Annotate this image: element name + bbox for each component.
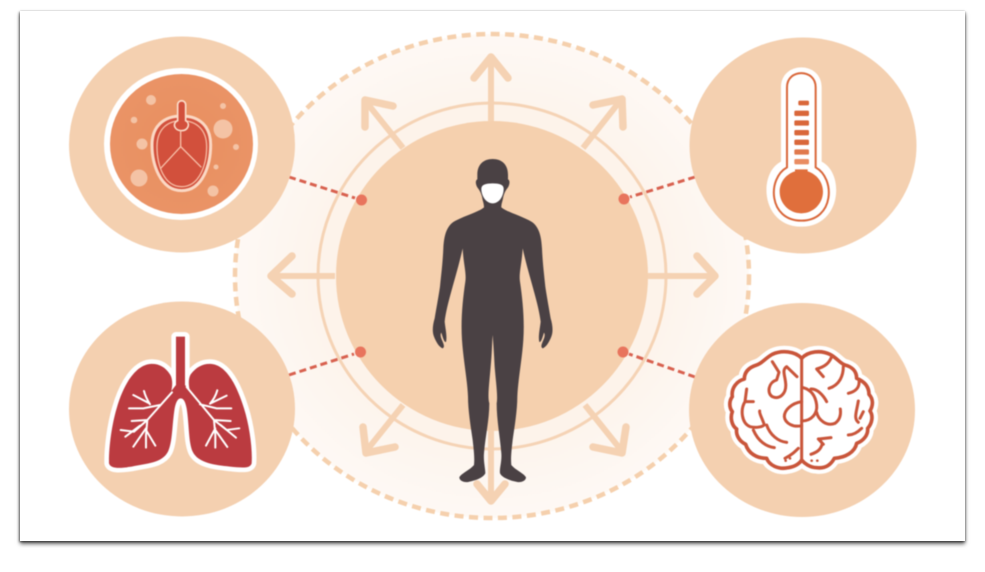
- panel: lungs: [69, 302, 295, 516]
- connector: bottom left: [289, 346, 366, 375]
- arrow up-left: [365, 100, 403, 148]
- panel: thermometer: [690, 38, 916, 254]
- organ outline: [152, 116, 211, 191]
- arrow left: [271, 256, 335, 294]
- connector: top right: [618, 177, 695, 204]
- arrow down-left: [363, 405, 403, 453]
- brain icon: [730, 352, 872, 468]
- lungs icon: [109, 337, 252, 468]
- central radiating diagram: [235, 34, 749, 518]
- organ icon: [152, 101, 211, 191]
- panel: brain: [689, 303, 915, 517]
- arrow right: [648, 256, 715, 294]
- thermometer outline: [774, 73, 829, 221]
- outer ring: [318, 103, 666, 449]
- face mask: [481, 183, 504, 203]
- bronchial branches: [121, 387, 239, 448]
- organ tube: [174, 101, 188, 131]
- human figure: [433, 159, 553, 482]
- white ring: [104, 68, 258, 220]
- connector: top left: [289, 177, 367, 206]
- panel disc: [689, 303, 915, 517]
- arrow up-right: [583, 99, 623, 148]
- connector: bottom right: [618, 346, 695, 377]
- arrow down: [477, 430, 505, 501]
- organ dividers: [161, 131, 201, 168]
- panel disc: [69, 36, 295, 252]
- inner circle: [336, 121, 648, 431]
- brain outline: [730, 352, 872, 468]
- thermometer halo: [766, 67, 836, 227]
- panel disc: [69, 302, 295, 516]
- brain folds: [742, 357, 863, 460]
- thermometer ticks: [794, 101, 809, 164]
- panel disc: [690, 38, 916, 254]
- thermometer bulb: [780, 169, 823, 213]
- radiating arrows: [271, 57, 715, 501]
- panel: skin and organ: [69, 36, 295, 252]
- orange skin field: [110, 74, 253, 214]
- brain dots: [784, 457, 819, 462]
- outer dashed boundary: [235, 34, 749, 518]
- arrow up: [474, 57, 508, 121]
- arrow down-right: [585, 405, 626, 453]
- lung shape: [109, 337, 252, 468]
- body silhouette: [433, 159, 553, 482]
- thermometer icon: [766, 67, 836, 227]
- skin spots: [130, 95, 239, 196]
